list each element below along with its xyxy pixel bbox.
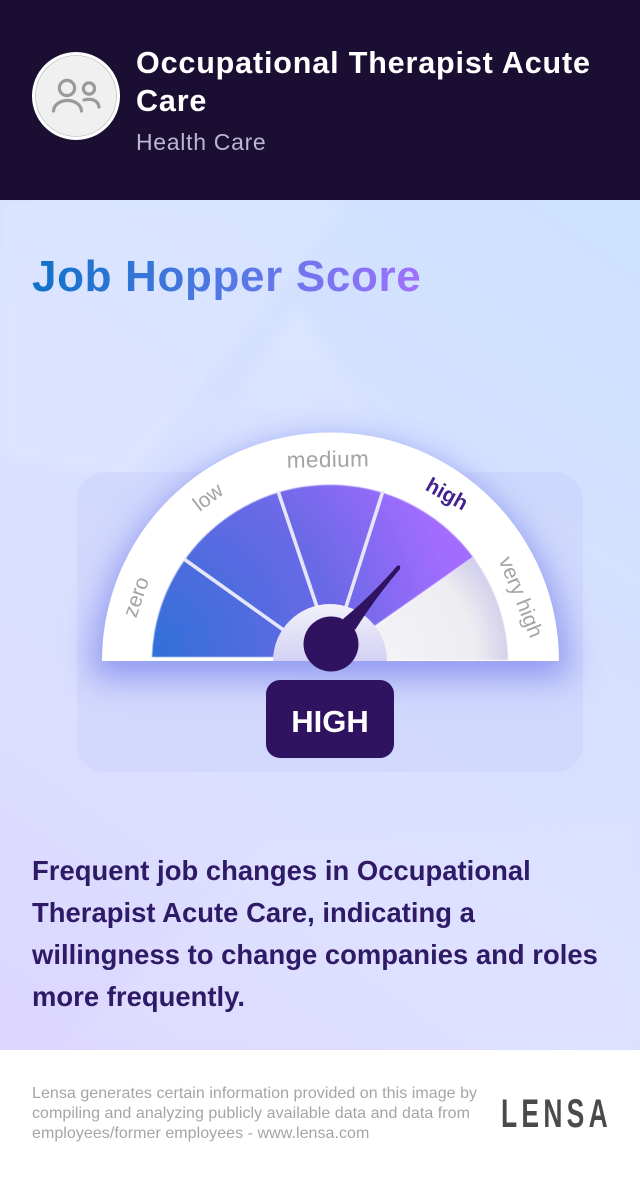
gauge backdrop [77,472,583,772]
logo: LENSA [501,1092,612,1136]
hub [273,604,387,661]
gauge labels: zero [119,574,154,620]
needle [304,565,400,672]
segment separators [184,491,383,631]
icon: people avatar [32,52,120,140]
gauge labels: low [189,478,228,516]
background shapes [0,200,640,1050]
gauge white arc [102,433,559,661]
description: Frequent job changes in Occupational Therapist Acute Care, indicating a willingness to change companies and roles more frequently. [32,855,598,1012]
gauge labels: high [422,474,472,515]
remaining segment [330,557,508,660]
heading: Job Hopper Score [32,252,421,301]
disclaimer: Lensa generates certain information provided on this image by compiling and analyzing publicly available data and data from employees/former employees - www.lensa.com [32,1085,477,1142]
gauge labels: very high [494,553,547,641]
footer panel [0,1050,640,1178]
job title: Occupational Therapist Acute Care [136,46,591,118]
gauge labels: medium [287,446,369,473]
score badge [266,680,394,758]
header panel [0,0,640,200]
industry subtitle: Health Care [136,129,266,155]
gauge shadow [92,440,569,678]
gauge labels [119,446,547,641]
filled segments [152,485,473,657]
main panel [0,200,640,1050]
score badge: HIGH [291,704,369,739]
gauge [76,421,585,758]
